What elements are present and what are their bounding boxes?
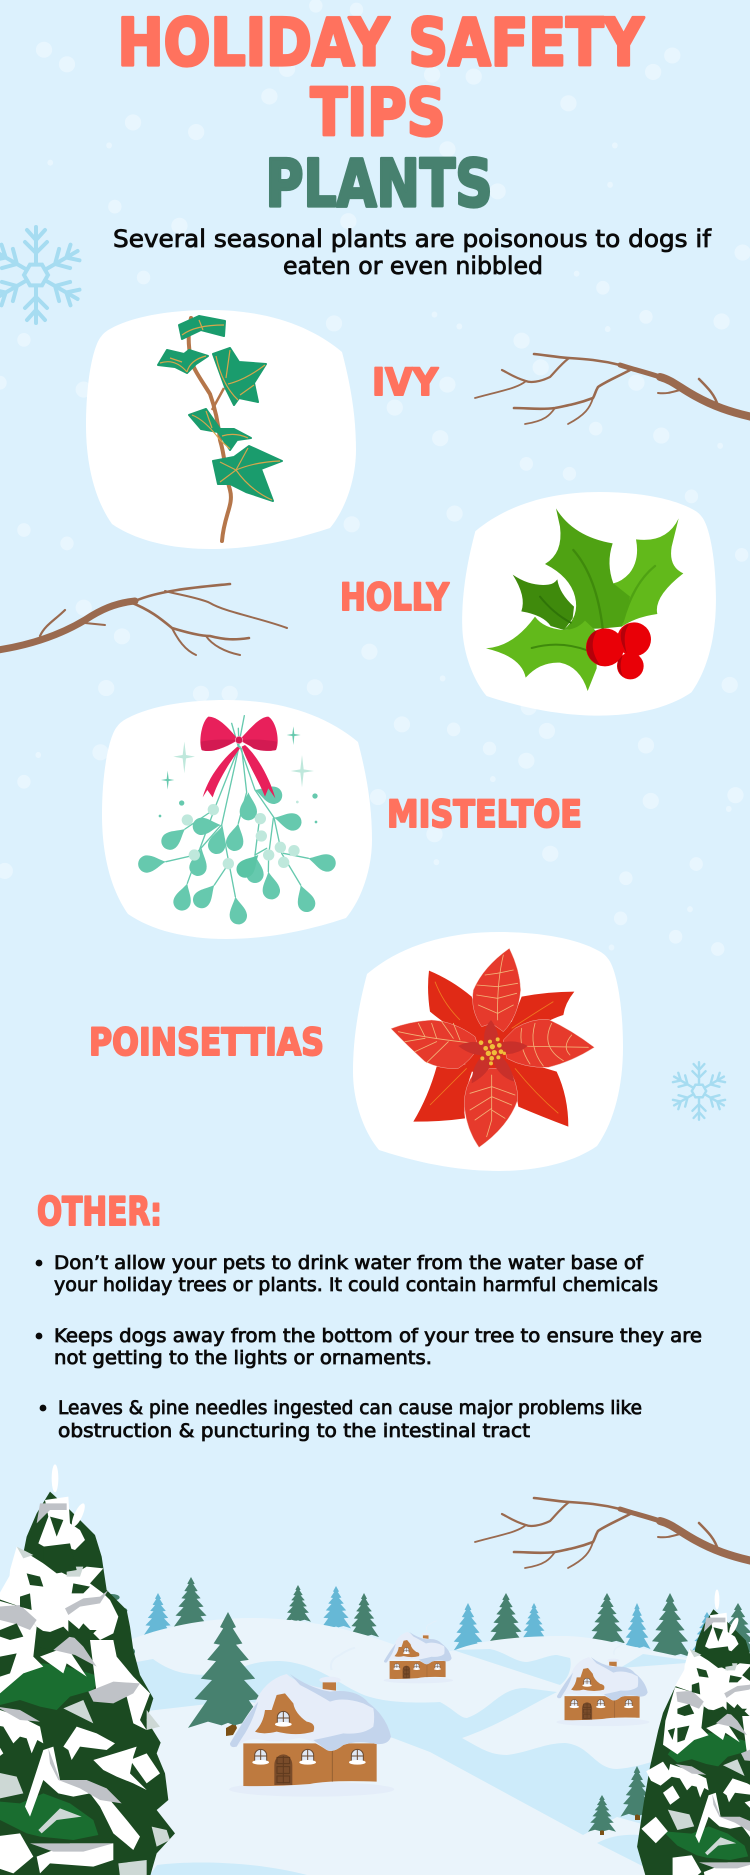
tip 1: water base: Don’t allow your pets to drink water from the water base of bbox=[54, 1252, 644, 1274]
intro text: Several seasonal plants are poisonous to dogs if bbox=[113, 225, 712, 253]
tip 3: leaves and pine needles: obstruction & puncturing to the intestinal tract bbox=[58, 1420, 530, 1442]
heading: plants: PLANTS bbox=[266, 147, 492, 222]
small pine trees right bbox=[588, 1766, 654, 1835]
illustration: poinsettia flower bbox=[391, 948, 594, 1147]
tip 2: bottom of tree: Keeps dogs away from the bottom of your tree to ensure they are bbox=[54, 1325, 702, 1347]
illustration: holly leaves and berries bbox=[486, 508, 683, 691]
title: holiday safety tips bbox=[118, 6, 644, 151]
distant pine trees bbox=[143, 1577, 750, 1657]
tip 2: bottom of tree: not getting to the lights or ornaments. bbox=[54, 1347, 432, 1369]
label: holly: HOLLY bbox=[340, 576, 450, 619]
branch: upper right bbox=[475, 354, 750, 424]
cottage: front bbox=[229, 1648, 394, 1797]
heading: other: OTHER: bbox=[37, 1190, 162, 1235]
label: ivy: IVY bbox=[372, 361, 439, 404]
intro text bbox=[113, 225, 712, 280]
tip 3: leaves and pine needles: Leaves & pine needles ingested can cause major problems like bbox=[58, 1397, 642, 1419]
title: holiday safety tips: HOLIDAY SAFETY bbox=[118, 6, 644, 81]
snowy hills bbox=[0, 1618, 750, 1875]
panel: ivy bbox=[86, 310, 356, 549]
cottage: far bbox=[384, 1621, 453, 1683]
large pine tree bbox=[188, 1612, 268, 1736]
tip 1: water base: your holiday trees or plants. It could contain harmful chemicals bbox=[54, 1274, 658, 1296]
panel: mistletoe bbox=[102, 700, 372, 939]
cottage: right bbox=[556, 1642, 650, 1726]
branch: lower right bbox=[475, 1498, 750, 1568]
label: poinsettias: POINSETTIAS bbox=[89, 1021, 324, 1064]
falling snow dots, middle section bbox=[0, 600, 744, 956]
tip 2: bottom of tree bbox=[36, 1325, 702, 1369]
intro text: eaten or even nibbled bbox=[283, 252, 543, 280]
falling snow dots, upper section bbox=[0, 0, 750, 562]
title: holiday safety tips: TIPS bbox=[310, 76, 446, 151]
tip 1: water base bbox=[36, 1252, 658, 1296]
panel: holly bbox=[462, 492, 716, 716]
illustration: ivy sprig bbox=[158, 316, 282, 541]
label: mistletoe: MISTELTOE bbox=[387, 793, 582, 836]
panel: poinsettias bbox=[353, 932, 623, 1171]
tip 3: leaves and pine needles bbox=[40, 1397, 642, 1442]
illustration: mistletoe with red bow bbox=[137, 716, 338, 926]
branch: left bbox=[0, 584, 287, 655]
icon: snowflake right bbox=[671, 1062, 727, 1120]
snowy fir left bbox=[0, 1464, 175, 1875]
icon: snowflake left bbox=[0, 227, 83, 323]
snowy fir right bbox=[637, 1590, 750, 1875]
